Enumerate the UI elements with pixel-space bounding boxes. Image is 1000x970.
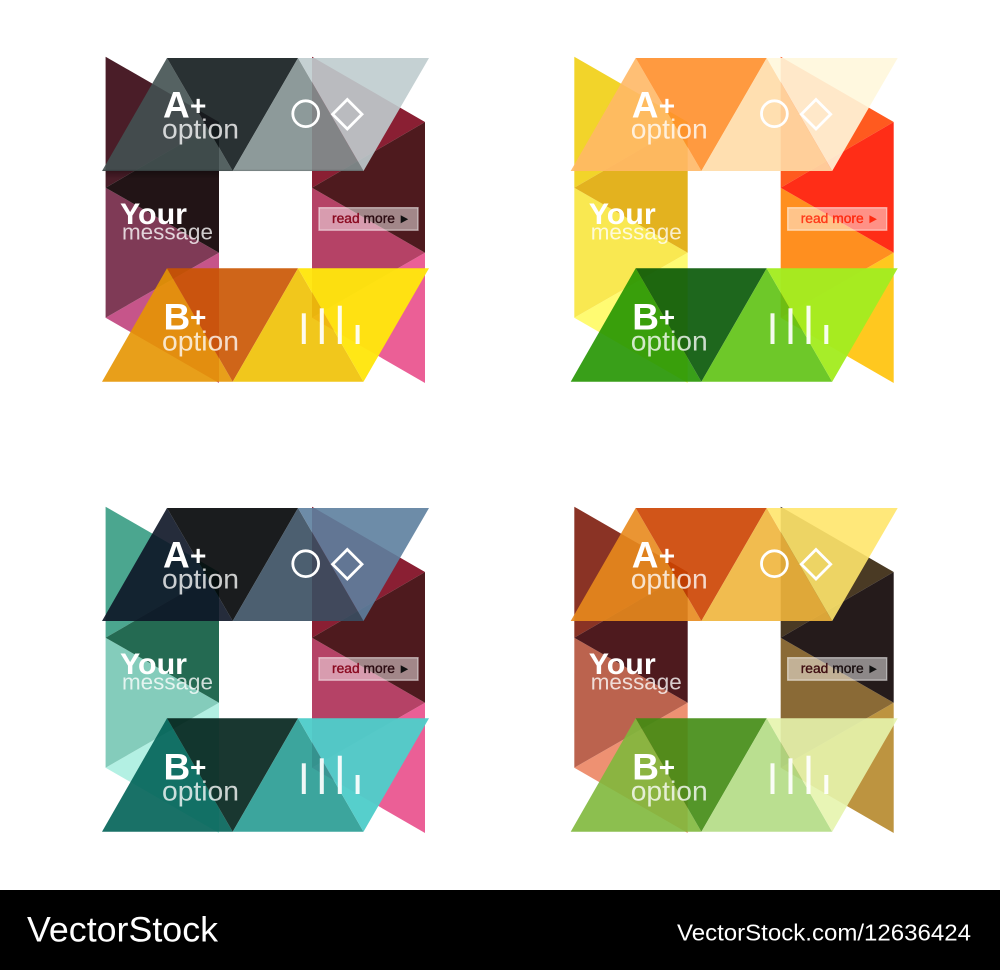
bottom band triangles [571,718,898,832]
icon: bars [770,756,828,794]
left column triangles [106,57,219,383]
left column triangles [574,57,688,383]
bottom band triangles [102,268,429,382]
top band triangles [102,58,429,171]
heading: B+: B [632,746,659,787]
right column triangles [781,57,894,383]
footer url text: VectorStock.com/12636424 [677,919,971,945]
read more button: read more [801,211,864,226]
icon: circle [293,551,319,577]
icon: circle [293,101,319,127]
top band triangles [571,58,898,171]
text: option: option [631,113,708,144]
heading: B+: + [190,752,206,783]
left column triangles [106,507,219,833]
icon: diamond [801,100,831,129]
right column triangles [312,57,425,383]
read more button [788,208,887,230]
bottom band triangles [571,268,898,382]
top band triangles [571,508,898,621]
footer bar [0,890,1000,970]
text: option: option [631,563,708,594]
heading: Your: Your [120,198,187,231]
heading: Your: Your [120,648,187,681]
left column triangles [574,507,688,833]
text: message: message [591,220,682,244]
heading: B+: + [659,752,675,783]
heading: A+: A [163,85,190,126]
text: message: message [591,670,682,694]
bottom band triangles [102,718,429,832]
heading: B+: B [164,746,190,787]
heading: A+: + [190,540,206,571]
text: option: option [162,563,239,594]
text: message: message [122,220,213,244]
read more button: read more [332,211,395,226]
heading: Your: Your [589,198,656,231]
right column triangles [781,507,894,833]
heading: A+: + [659,90,675,121]
icon: diamond [333,100,362,129]
top band triangles [102,508,429,621]
icon: bars [302,306,360,344]
icon: diamond [801,550,831,579]
heading: B+: + [190,302,206,333]
icon: circle [762,551,787,577]
read more button [319,208,418,230]
read more button [319,658,418,680]
read more button: read more [801,661,864,676]
heading: A+: + [190,90,206,121]
text: option: option [631,326,708,357]
heading: B+: B [164,296,190,337]
heading: A+: A [632,85,658,126]
icon: circle [762,101,787,127]
read more button [788,658,887,680]
heading: Your: Your [589,648,656,681]
text: option: option [631,776,708,807]
icon: bars [770,306,828,344]
heading: B+: B [632,296,659,337]
panel: dark and amber module [102,57,429,383]
panel: rust and lime module [571,507,898,833]
heading: A+: A [163,535,190,576]
icon: bars [302,756,360,794]
text: option: option [162,776,239,807]
heading: A+: A [632,535,658,576]
right column triangles [312,507,425,833]
panel: navy and teal module [102,507,429,833]
text: message: message [122,670,213,694]
text: option: option [162,113,239,144]
footer logo text: VectorStock [27,911,219,950]
text: option: option [162,326,239,357]
read more button: read more [332,661,395,676]
icon: diamond [333,550,362,579]
heading: B+: + [659,302,675,333]
panel: orange and green module [571,57,898,383]
heading: A+: + [659,540,675,571]
